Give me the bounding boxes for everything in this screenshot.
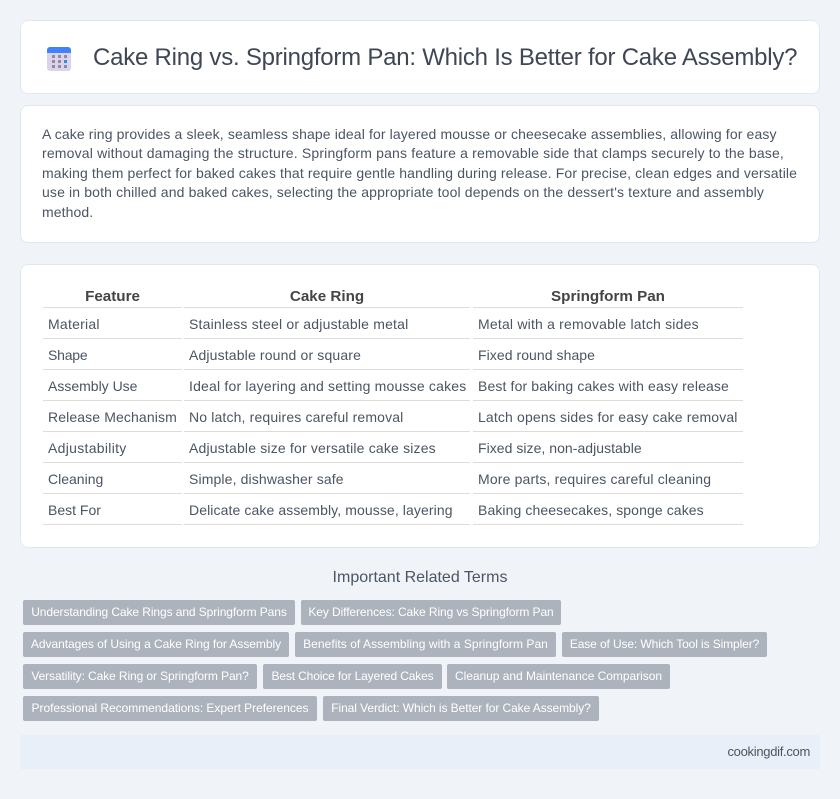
header card [20,20,820,94]
related term tags: Key Differences: Cake Ring vs Springform Pan [308,605,554,619]
intro paragraph: method. [42,204,93,220]
comparison table: Feature [85,288,140,305]
related term tags: Ease of Use: Which Tool is Simpler? [570,637,759,651]
related term tags: Advantages of Using a Cake Ring for Assembly [31,637,281,651]
related term tags: Cleanup and Maintenance Comparison [455,669,662,683]
intro text panel [20,105,820,243]
comparison table: No latch, requires careful removal [189,409,403,425]
comparison table: Adjustable round or square [189,347,361,363]
related term tags: Understanding Cake Rings and Springform Pans [31,605,287,619]
title: Cake Ring vs. Springform Pan: Which Is Better for Cake Assembly? [93,44,797,71]
comparison table: More parts, requires careful cleaning [478,471,711,487]
comparison table: Delicate cake assembly, mousse, layering [189,502,453,518]
comparison table: Fixed round shape [478,347,595,363]
intro paragraph: A cake ring provides a sleek, seamless shape ideal for layered mousse or cheesecake assemblies, allowing for easy [42,126,777,142]
related term tags: Versatility: Cake Ring or Springform Pan? [31,669,249,683]
comparison table: Material [48,316,100,332]
comparison table: Adjustability [48,440,127,456]
comparison table: Best For [48,502,101,518]
comparison table: Baking cheesecakes, sponge cakes [478,502,704,518]
intro paragraph: removal without damaging the structure. Springform pans feature a removable side that clamps securely to the base, [42,145,784,161]
comparison table: Fixed size, non-adjustable [478,440,642,456]
comparison table: Best for baking cakes with easy release [478,378,729,394]
icon: calendar [47,47,71,71]
comparison table: Adjustable size for versatile cake sizes [189,440,436,456]
related terms heading: Important Related Terms [333,569,507,586]
related term tags [23,600,767,721]
table panel [20,264,820,548]
comparison table: Cleaning [48,471,103,487]
intro paragraph [42,126,797,220]
comparison table: Springform Pan [551,288,665,305]
comparison table: Simple, dishwasher safe [189,471,344,487]
comparison table: Latch opens sides for easy cake removal [478,409,738,425]
footer source: cookingdif.com [727,744,810,759]
related term tags: Final Verdict: Which is Better for Cake Assembly? [331,701,591,715]
footer bar [20,735,820,769]
comparison table [43,288,743,525]
comparison table: Ideal for layering and setting mousse cakes [189,378,466,394]
intro paragraph: making them perfect for baked cakes that require gentle handling during release. For precise, clean edges and versatile [42,165,797,181]
related term tags: Professional Recommendations: Expert Preferences [32,701,308,715]
comparison table: Metal with a removable latch sides [478,316,699,332]
comparison table: Stainless steel or adjustable metal [189,316,408,332]
related term tags: Best Choice for Layered Cakes [271,669,434,683]
comparison table: Release Mechanism [48,409,177,425]
related term tags: Benefits of Assembling with a Springform Pan [303,637,548,651]
comparison table: Shape [48,347,87,363]
comparison table: Cake Ring [290,288,364,305]
comparison table: Assembly Use [48,378,137,394]
intro paragraph: use in both chilled and baked cakes, selecting the appropriate tool depends on the dessert's texture and assembly [42,184,764,200]
